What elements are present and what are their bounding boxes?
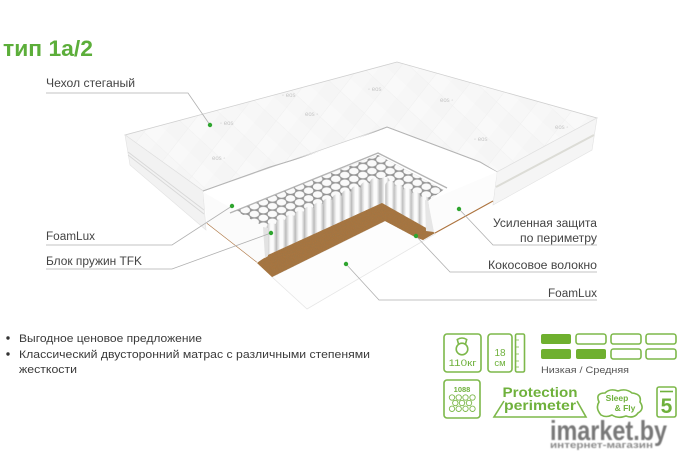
- spring block TFK: [232, 155, 444, 259]
- icon: height 18 cm: 18: [494, 348, 506, 359]
- watermark: imarket.by: интернет-магазин: [550, 440, 653, 451]
- mattress quilted cover: ◦ eos: [282, 93, 295, 99]
- feature list: Классический двусторонний матрас с различными степенями: [19, 349, 370, 361]
- callout: reinforced perimeter: по периметру: [520, 233, 597, 245]
- icon: 5 year warranty: 5: [661, 395, 673, 418]
- callout: FoamLux bottom: [344, 262, 597, 300]
- mattress quilted cover: eos ◦: [440, 98, 453, 104]
- mattress quilted cover: ◦ eos: [368, 87, 381, 93]
- icon: height 18 cm: [488, 334, 524, 372]
- callout: quilted cover: [46, 78, 212, 127]
- badge: protection perimeter: Protection: [502, 384, 578, 400]
- callout: coconut fibre: Кокосовое волокно: [488, 260, 597, 272]
- mattress quilted cover: [125, 62, 597, 230]
- mattress illustration: [125, 62, 597, 309]
- firmness caption: Низкая / Средняя: [541, 365, 629, 376]
- callout: reinforced perimeter: Усиленная защита: [493, 218, 598, 230]
- mattress quilted cover: eos ◦: [555, 125, 568, 131]
- mattress quilted cover: ◦ eos: [220, 121, 233, 127]
- callout: TFK spring block: Блок пружин TFK: [46, 256, 142, 268]
- mattress quilted cover: ◦ eos: [474, 137, 487, 143]
- callout: coconut fibre: [414, 234, 597, 272]
- icon: 1088 springs: 1088: [454, 385, 470, 394]
- foam perimeter walls: [203, 128, 497, 262]
- badge: sleep and fly cloud: & Fly: [615, 403, 636, 413]
- mattress quilted cover: eos ◦: [305, 112, 318, 118]
- badge: protection perimeter: perimeter: [504, 397, 577, 413]
- coconut fibre layer: [207, 201, 493, 277]
- feature list: жесткости: [19, 364, 77, 376]
- callout: reinforced perimeter: [457, 207, 598, 245]
- callout: quilted cover: Чехол стеганый: [46, 78, 135, 90]
- icon: height 18 cm: см: [494, 358, 506, 369]
- badge: sleep and fly cloud: [597, 390, 642, 417]
- mattress quilted cover: eos ◦: [212, 156, 225, 162]
- badge: protection perimeter: [494, 384, 586, 417]
- title: тип 1а/2: [3, 36, 93, 61]
- icon: 1088 springs: [444, 380, 480, 418]
- badge: sleep and fly cloud: Sleep: [606, 393, 628, 403]
- feature list: [6, 333, 370, 376]
- feature list: Выгодное ценовое предложение: [19, 333, 202, 345]
- callout: FoamLux bottom: FoamLux: [548, 288, 597, 300]
- callout: FoamLux left: [46, 204, 234, 245]
- firmness scale side one: [541, 334, 676, 344]
- bottom foam layer: [272, 221, 435, 309]
- callout: FoamLux left: FoamLux: [46, 231, 95, 243]
- firmness scale side two: [541, 349, 676, 359]
- callout: TFK spring block: [46, 231, 273, 269]
- icon: max load 110 kg: [444, 334, 481, 372]
- icon: 5 year warranty: [657, 387, 676, 418]
- icon: max load 110 kg: 110кг: [448, 358, 477, 369]
